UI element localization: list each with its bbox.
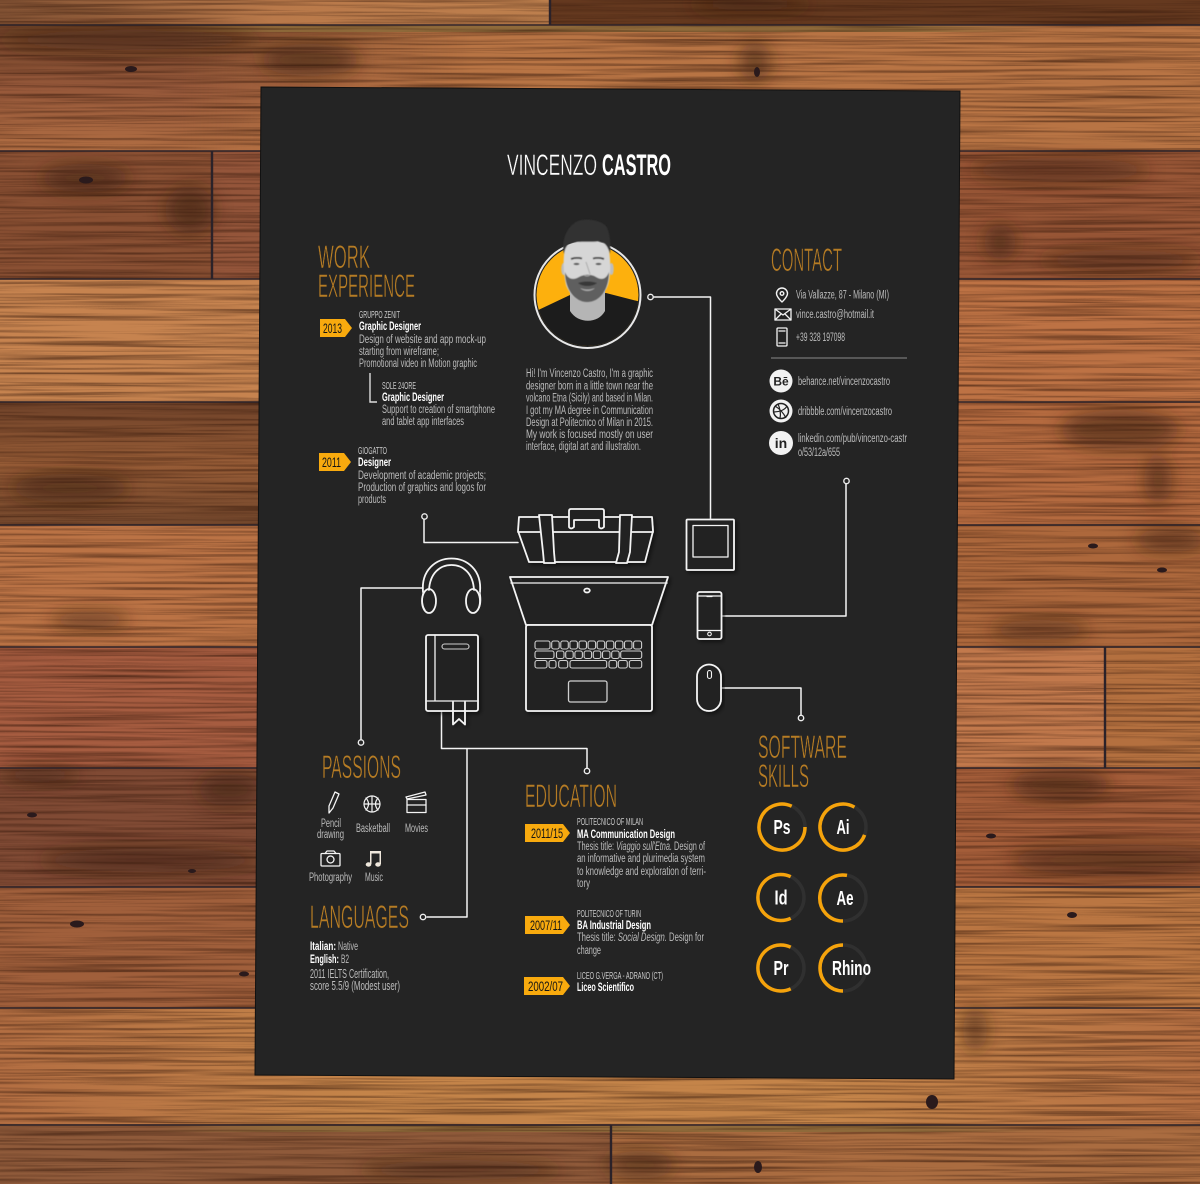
skill ring: Id [758,874,804,921]
panel: contact [769,242,907,459]
degree: MA Milan: to knowledge and exploration of terri- [577,866,706,878]
job: 2011 Giogatto: Development of academic projects; [358,470,486,482]
degree: MA Milan: 2011/15 [531,825,563,841]
bio text: designer born in a little town near the [526,380,653,392]
language list: B2 [341,954,349,966]
bio text: I got my MA degree in Communication [526,405,653,417]
label: basketball: Basketball [356,823,390,835]
job: 2013 Gruppo Zenit: 2013 [323,320,342,336]
language list: English: [310,952,339,966]
job: Sole 24ore: Graphic Designer [382,390,444,404]
icon: location pin [776,288,788,302]
degree: BA Turin [525,908,704,957]
bio text: Design at Politecnico of Milan in 2015. [526,417,653,429]
icon: behance: Bē [773,374,789,388]
linkedin link: linkedin.com/pub/vincenzo-castr [798,433,907,445]
icon: tablet [686,520,734,570]
panel: languages [310,899,409,993]
behance link: behance.net/vincenzocastro [798,376,890,388]
label: music: Music [365,872,383,884]
job: 2013 Gruppo Zenit: Design of website and app mock-up [359,334,486,346]
degree: MA Milan: tory [577,878,590,890]
connector lines [361,297,846,917]
degree: BA Turin: change [577,945,601,957]
bio text: volcano Etna (Sicily) and based in Milan. [526,392,653,404]
icon: headphones [422,558,481,613]
degree: BA Turin: Thesis title: Social Design. Design for [577,932,704,944]
job: 2011 Giogatto: Designer [358,455,391,469]
skill ring: Id: Id [774,888,788,910]
icon: linkedin: in [775,435,787,451]
label: pencil drawing: drawing [317,829,344,841]
skill ring: Ps [759,804,805,850]
panel: education [524,778,706,995]
icon: phone [777,328,787,346]
label: movies: Movies [405,823,428,835]
icon: laptop [510,577,668,711]
dribbble link: dribbble.com/vincenzocastro [798,406,892,418]
panel: software skills: SOFTWARE [758,729,847,765]
address: Via Vallazze, 87 - Milano (MI) [796,290,889,302]
icon: basketball [364,796,380,812]
icon: dribbble [770,400,792,422]
heading: software skills [758,729,847,794]
panel: passions: PASSIONS [322,749,401,785]
degree: Liceo: 2002/07 [528,978,563,994]
language list: 2011 IELTS Certification, [310,967,389,981]
icon: pencil [329,792,339,813]
job: 2011 Giogatto: GIOGATTO [358,445,387,457]
heading: work experience: WORK [318,239,370,275]
bio text: interface, digital art and illustration. [526,441,641,453]
skill ring: Rhino: Rhino [832,958,871,980]
label: pencil drawing: Pencil [321,818,341,830]
job: 2011 Giogatto: 2011 [322,454,341,470]
degree: MA Milan: an informative and plurimedia system [577,853,705,865]
resume poster on wood floor: LANGUAGES [310,899,409,935]
icon: linkedin [769,431,793,455]
language list: score 5.5/9 (Modest user) [310,979,400,993]
bio text [526,368,653,453]
panel: software skills [758,729,871,991]
degree: Liceo [524,970,663,995]
icon: envelope [775,309,791,320]
job: 2011 Giogatto [319,445,486,506]
language list: Native [338,941,358,953]
bio text: My work is focused mostly on user [526,429,653,441]
icon: camera [321,851,340,866]
skill ring: Ai: Ai [836,817,850,839]
skill ring: Rhino [820,945,871,991]
degree: MA Milan: POLITECNICO OF MILAN [577,816,643,828]
portrait photo [530,220,645,352]
job: Sole 24ore: SOLE 24ORE [382,380,416,392]
job: 2013 Gruppo Zenit: GRUPPO ZENIT [359,309,400,321]
job: 2011 Giogatto: products [358,494,386,506]
skill ring: Ai [820,804,866,850]
icon: behance [770,370,792,392]
degree: MA Milan: MA Communication Design [577,827,675,841]
job: Sole 24ore: and tablet app interfaces [382,416,464,428]
job: Sole 24ore: Support to creation of smartphone [382,404,495,416]
job: 2011 Giogatto: Production of graphics and logos for [358,482,486,494]
skill ring: Pr: Pr [774,958,789,980]
icon: smartphone [698,592,722,639]
skill ring: Ae [820,875,866,921]
label: pencil drawing [317,818,344,841]
phone number: +39 328 197098 [796,332,845,344]
panel: passions [309,749,428,884]
heading: work experience [318,239,415,304]
skill ring: Ae: Ae [836,888,854,910]
job: 2013 Gruppo Zenit: Graphic Designer [359,319,421,333]
panel: work experience [318,239,495,506]
heading: software skills: SKILLS [758,758,809,794]
bio text: Hi! I'm Vincenzo Castro, I'm a graphic [526,368,653,380]
icon: notebook [426,635,478,724]
panel: education: EDUCATION [525,778,617,814]
language list [310,939,400,993]
linkedin link: o/53/12a/655 [798,447,840,459]
job: 2013 Gruppo Zenit [320,309,486,370]
degree: Liceo: LICEO G.VERGA - ADRANO (CT) [577,970,663,982]
label: photography: Photography [309,872,352,884]
title: VINCENZO [507,149,597,182]
paper sheet [255,87,960,1079]
email: vince.castro@hotmail.it [796,309,875,321]
icon: briefcase [518,509,653,563]
job: 2013 Gruppo Zenit: starting from wireframe; [359,346,439,358]
skill ring: Ps: Ps [774,817,790,839]
connector end dots [358,294,849,920]
job: Sole 24ore [370,373,495,428]
job: 2013 Gruppo Zenit: Promotional video in Motion graphic [359,358,477,370]
degree: BA Turin: BA Industrial Design [577,918,651,932]
linkedin link [798,433,907,459]
language list: Italian: [310,939,336,953]
degree: MA Milan: Thesis title: Viaggio sull'Etna. Design of [577,841,706,853]
panel: work experience: EXPERIENCE [318,268,415,304]
degree: BA Turin: POLITECNICO OF TURIN [577,908,641,920]
panel: contact: CONTACT [771,242,842,278]
icon: mouse [697,664,721,711]
degree: MA Milan [525,816,706,890]
icon: music notes [366,851,381,867]
degree: Liceo: Liceo Scientifico [577,980,634,994]
skill ring: Pr [758,945,804,991]
title: CASTRO [602,149,671,182]
degree: BA Turin: 2007/11 [530,917,562,933]
icon: clapperboard [406,792,426,812]
